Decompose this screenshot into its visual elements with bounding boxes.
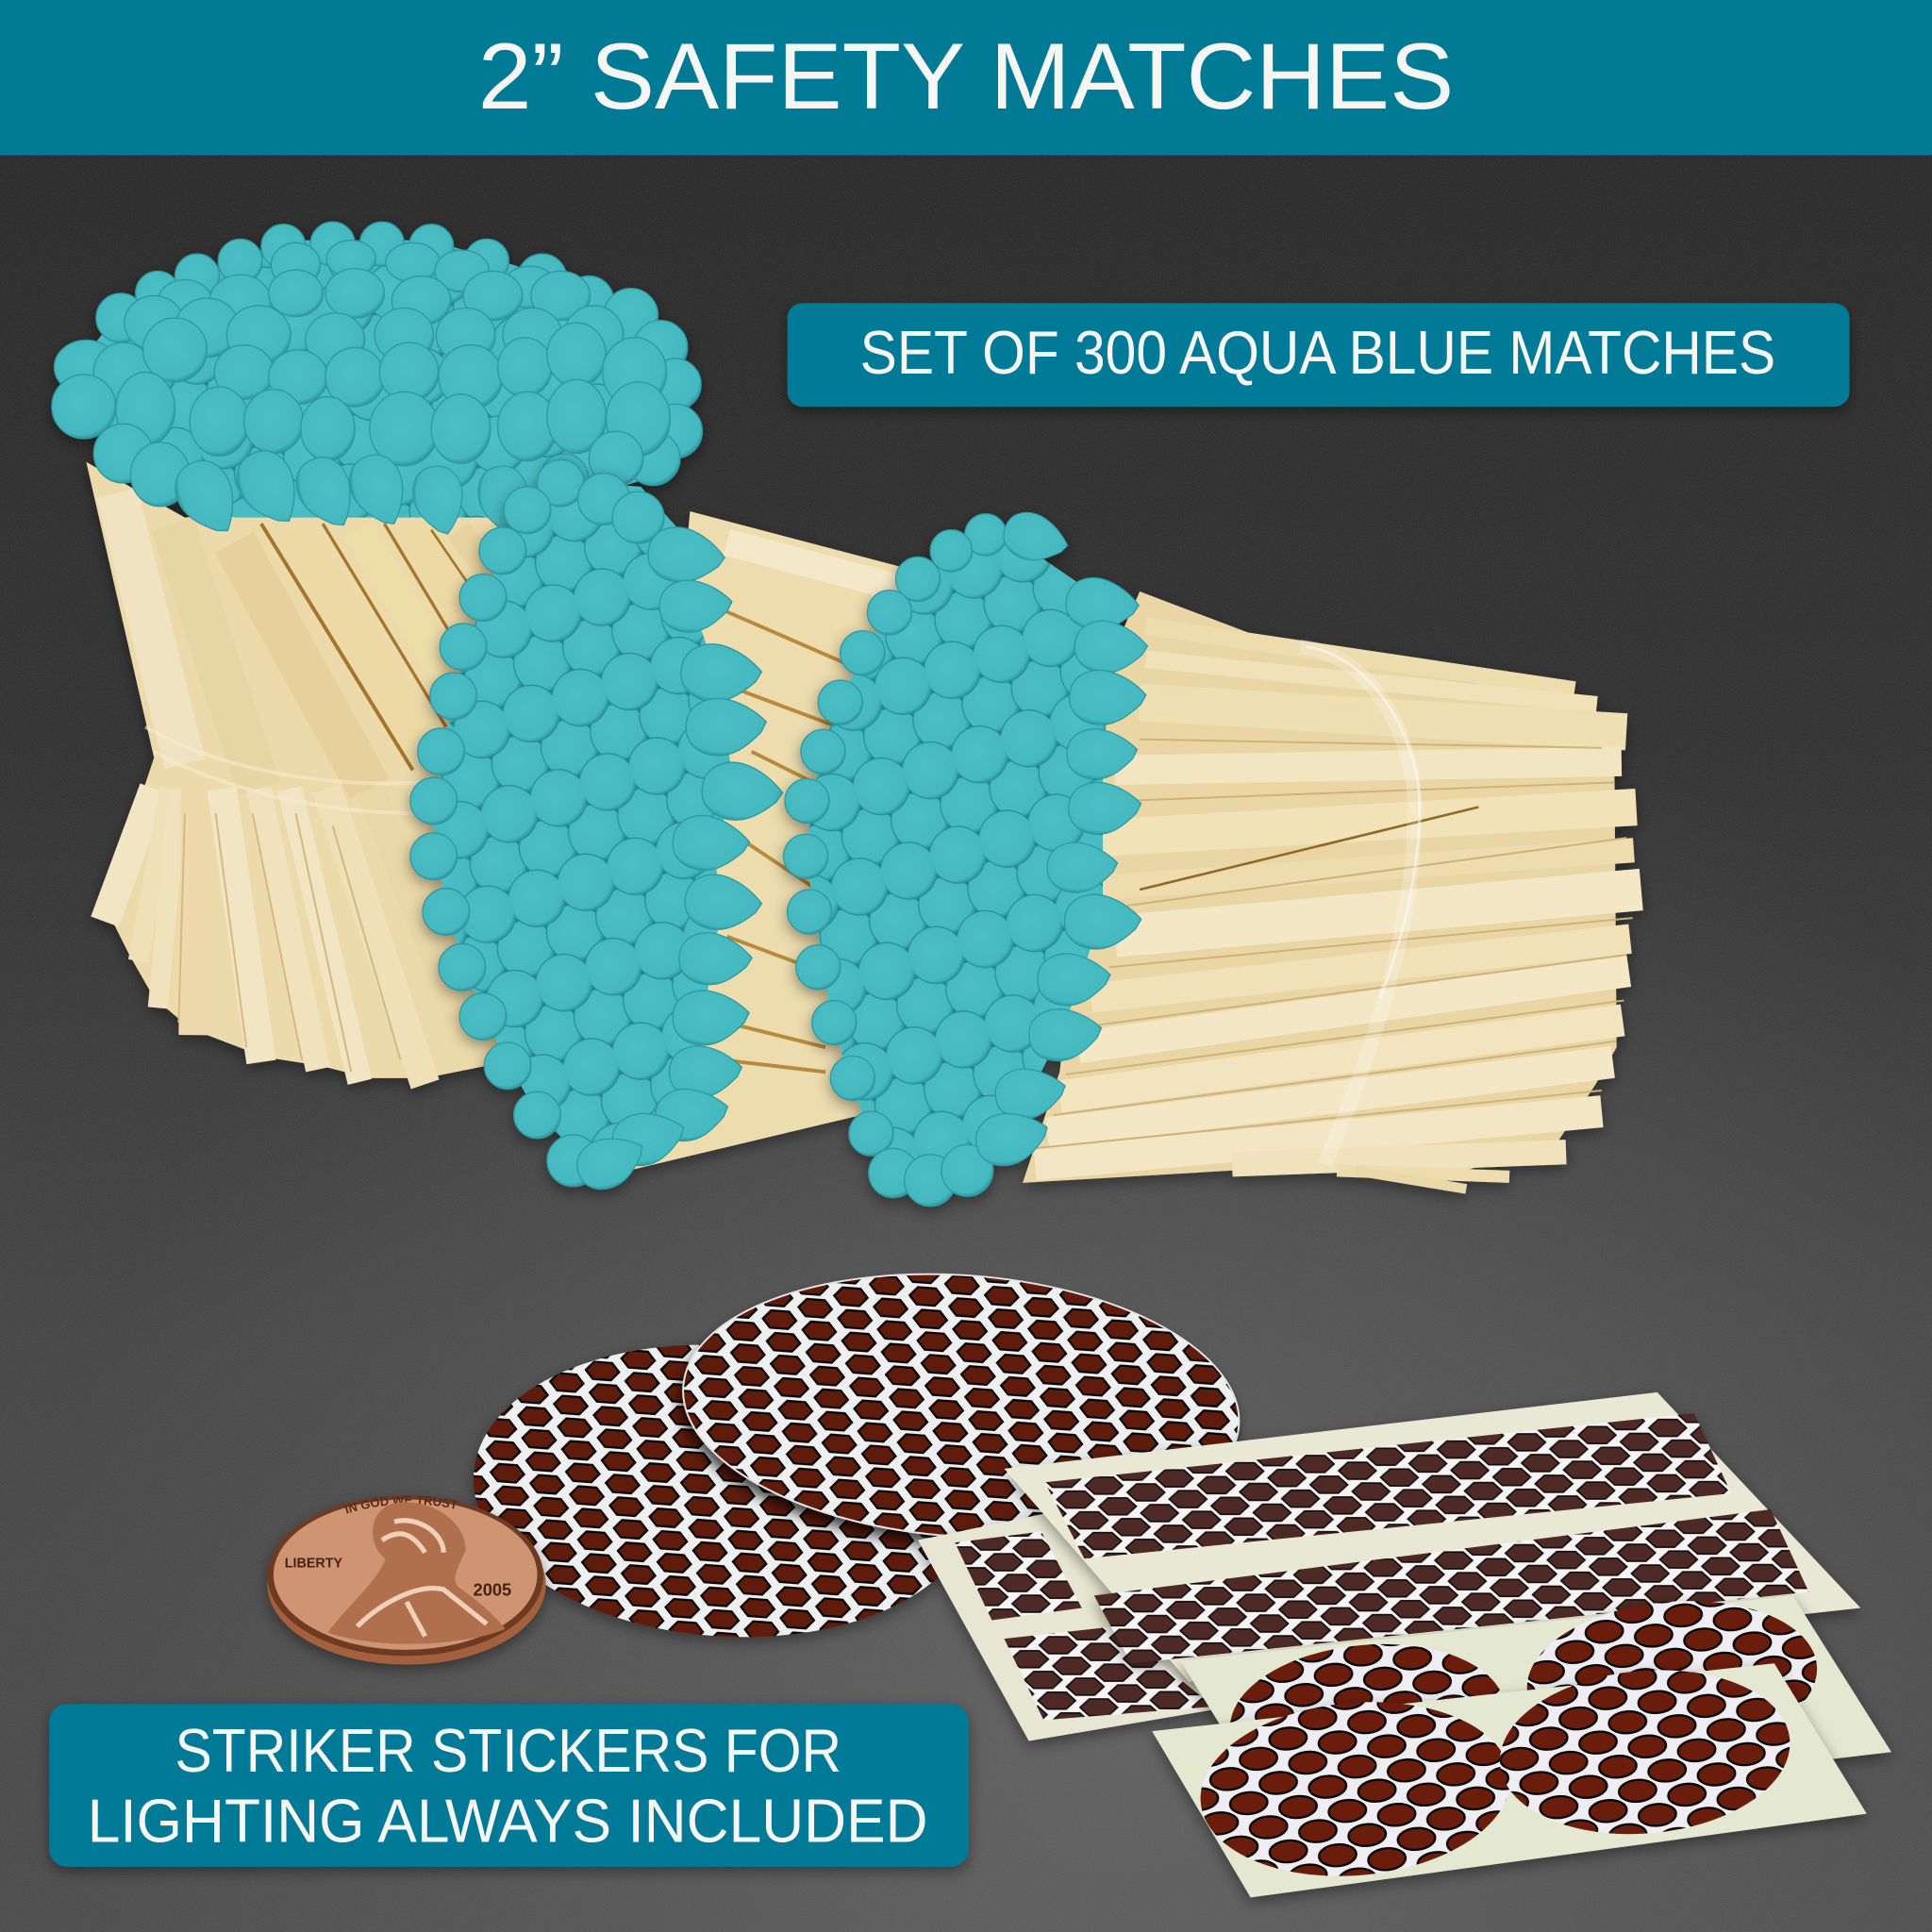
aqua heads of front bundle [784, 506, 1149, 1207]
round striker sticker, back [463, 1328, 986, 1654]
penny for scale [262, 1496, 555, 1674]
wooden sticks of standing bundle [86, 462, 542, 1084]
title banner: 2” SAFETY MATCHES [478, 25, 1454, 129]
circle sticker sheet, back [1180, 1590, 1891, 1824]
circle sticker sheet, front [1152, 1658, 1867, 1897]
set of 300 callout [788, 303, 1849, 407]
set of 300 callout: SET OF 300 AQUA BLUE MATCHES [860, 318, 1775, 387]
aqua heads of middle bundle [410, 459, 786, 1196]
back striker strip sheet [918, 1513, 1232, 1741]
left standing match bundle [52, 222, 702, 1084]
penny motto: IN GOD WE TRUST [345, 1496, 458, 1513]
aqua heads of standing bundle [52, 222, 702, 544]
striker stickers callout: STRIKER STICKERS FOR [175, 1716, 841, 1785]
title banner [0, 0, 1932, 156]
wooden sticks of middle bundle [628, 511, 924, 1171]
penny inscriptions: LIBERTY [285, 1556, 343, 1571]
round striker sticker, front [675, 1257, 1248, 1556]
front striker strip sheet [1004, 1392, 1860, 1682]
clear rubber band on front bundle [1300, 647, 1420, 1164]
wooden sticks of front bundle [1023, 591, 1641, 1189]
rubber band on standing bundle [145, 727, 425, 813]
penny portrait [327, 1502, 506, 1644]
striker stickers callout [49, 1704, 969, 1867]
penny for scale: 2005 [474, 1579, 511, 1599]
striker stickers callout: LIGHTING ALWAYS INCLUDED [88, 1787, 928, 1856]
middle match bundle [410, 459, 924, 1196]
front match bundle [784, 506, 1641, 1207]
